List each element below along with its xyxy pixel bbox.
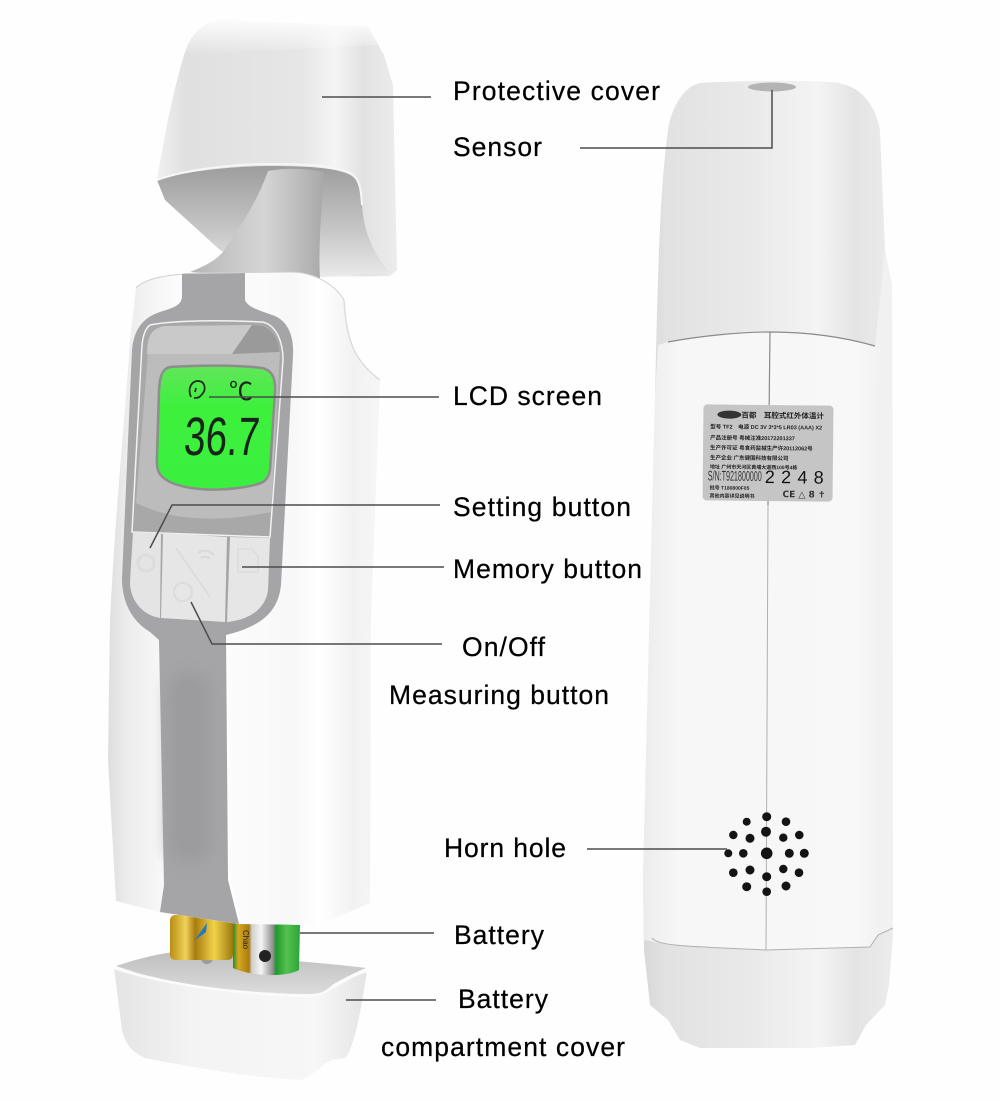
label: sensor: Sensor — [453, 132, 542, 162]
thermometer back view — [643, 81, 893, 1048]
protective cover — [157, 20, 397, 278]
product label — [703, 404, 834, 502]
display bezel — [132, 321, 283, 537]
product label: 生产企业 广东健围科技有限公司 — [710, 453, 789, 462]
product label: 其他内容详见说明书 — [710, 492, 755, 500]
ear icon — [190, 381, 205, 398]
battery compartment cover — [114, 951, 367, 1080]
product label: 批号 T180800F05 — [710, 484, 750, 492]
middle housing — [643, 285, 893, 950]
grey strap — [122, 273, 293, 924]
speaker holes — [724, 812, 809, 896]
sensor window — [748, 82, 796, 92]
product label: 生产许可证 粤食药监械生产许20112062号 — [710, 443, 813, 452]
label: compartment cover: compartment cover — [381, 1032, 625, 1062]
product label: S/N:T921800000 — [708, 467, 762, 484]
label: battery compartment cover: Battery — [458, 984, 549, 1014]
label: horn hole: Horn hole — [444, 833, 566, 863]
buttons — [130, 532, 270, 622]
product label: 2248 — [765, 467, 824, 488]
batteries — [170, 915, 300, 975]
callout lines — [150, 90, 772, 1000]
product label: CE △ 8 ✝ — [783, 490, 826, 501]
degree unit: ℃ — [229, 378, 253, 406]
label: setting button: Setting button — [453, 492, 631, 522]
label: LCD screen: LCD screen — [453, 381, 602, 411]
label: protective cover: Protective cover — [453, 76, 660, 106]
label: memory button: Memory button — [453, 554, 642, 584]
label: measuring button: Measuring button — [389, 680, 609, 710]
back seam — [668, 332, 875, 505]
reading: 36.7 — [182, 407, 262, 467]
thermometer body front — [108, 272, 380, 925]
product label: 百都 耳腔式红外体温计 — [741, 410, 824, 421]
product label: 产品注册号 粤械注准20172201337 — [710, 433, 795, 442]
battery: green: Chao — [241, 930, 250, 950]
green LCD screen — [157, 366, 275, 490]
battery: gold — [170, 915, 233, 964]
product label: 型号 TF2 电源 DC 3V 3*3*5 LR03 (AAA) X2 — [710, 422, 822, 432]
label: on/off: On/Off — [462, 632, 546, 662]
product label: 地址 广州市天河区黄埔大道西100号4栋 — [710, 463, 797, 471]
label: battery: Battery — [454, 920, 545, 950]
